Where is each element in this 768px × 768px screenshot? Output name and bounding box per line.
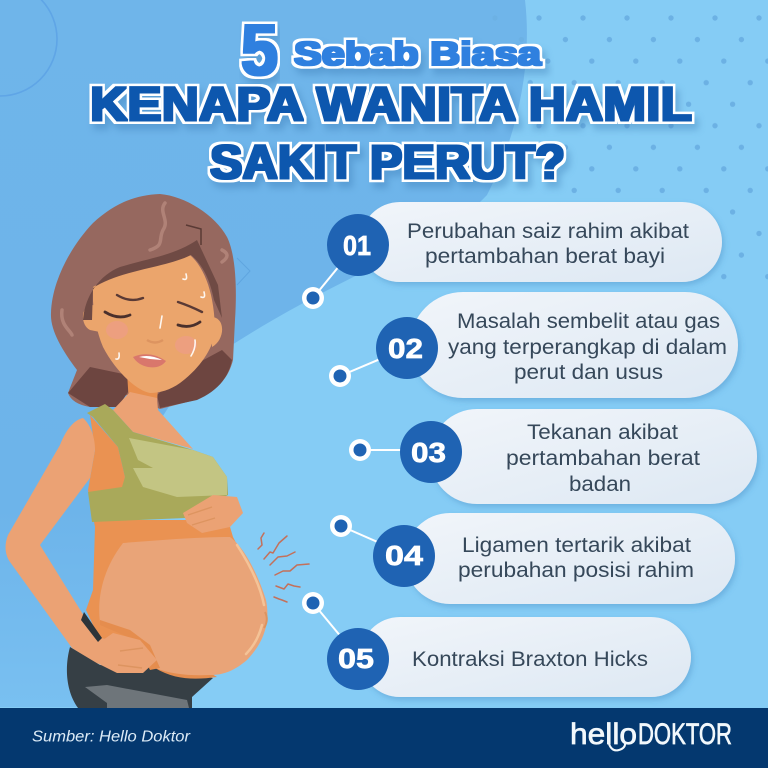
face bbox=[93, 255, 215, 393]
belly highlight bbox=[237, 545, 264, 654]
badge 03: 03 bbox=[411, 437, 446, 468]
hair shadow bbox=[68, 350, 232, 408]
item 05 bbox=[302, 592, 691, 697]
eyes bbox=[105, 312, 200, 326]
dot 02 bbox=[329, 365, 351, 387]
dot 03 bbox=[349, 439, 371, 461]
connector 02 bbox=[340, 357, 385, 376]
waistband bbox=[81, 612, 102, 642]
text 03: Tekanan akibat bbox=[527, 421, 678, 444]
connector 04 bbox=[341, 526, 382, 544]
top bbox=[87, 404, 228, 522]
dot 05 bbox=[302, 592, 324, 614]
pants bbox=[67, 647, 213, 708]
hair highlight bbox=[62, 203, 227, 335]
item 02 bbox=[329, 292, 738, 398]
pill 04 bbox=[405, 513, 735, 604]
logo: helloDOKTOR bbox=[570, 718, 732, 751]
text 02 bbox=[448, 310, 727, 384]
arm bbox=[6, 418, 110, 665]
text 03: badan bbox=[569, 473, 631, 496]
badge 05 bbox=[327, 628, 389, 690]
text 03 bbox=[506, 421, 700, 496]
text 02: Masalah sembelit atau gas bbox=[457, 310, 720, 333]
text 05: Kontraksi Braxton Hicks bbox=[412, 648, 648, 671]
head bbox=[62, 203, 227, 393]
cheeks bbox=[106, 321, 128, 339]
badge 01: 01 bbox=[343, 230, 371, 261]
footer bar bbox=[0, 708, 768, 768]
neck bbox=[127, 372, 172, 410]
fingers bbox=[118, 507, 215, 668]
text 01: pertambahan berat bayi bbox=[425, 245, 665, 268]
logo: helloDOKTOR: DOKTOR bbox=[638, 718, 732, 751]
lower hand shadow bbox=[100, 620, 160, 670]
badge 04: 04 bbox=[385, 540, 424, 571]
pants grey panel bbox=[85, 685, 189, 708]
text 01: Perubahan saiz rahim akibat bbox=[407, 220, 689, 243]
pill 01 bbox=[360, 202, 722, 282]
badge 02 bbox=[376, 317, 438, 379]
text 04: perubahan posisi rahim bbox=[458, 559, 694, 582]
top highlight bbox=[129, 438, 227, 497]
title: Kenapa Wanita Hamil: KENAPA WANITA HAMIL bbox=[90, 78, 692, 132]
chest bbox=[113, 392, 193, 449]
torso bbox=[86, 415, 245, 650]
badge 05: 05 bbox=[338, 643, 374, 674]
title bbox=[90, 11, 692, 190]
logo: helloDOKTOR: hello bbox=[570, 718, 637, 751]
mouth bbox=[133, 354, 166, 367]
list of causes bbox=[302, 202, 757, 697]
back hair bbox=[51, 194, 236, 409]
nose bbox=[147, 340, 163, 342]
sweat drops bbox=[116, 274, 205, 359]
title: Sakit Perut: SAKIT PERUT? bbox=[210, 136, 565, 190]
badge 01 bbox=[327, 214, 389, 276]
pill 03 bbox=[430, 409, 757, 504]
pill 02 bbox=[410, 292, 738, 398]
text 02: perut dan usus bbox=[514, 361, 663, 384]
item 03 bbox=[349, 409, 757, 504]
fringe shadow bbox=[83, 240, 222, 320]
dot 01 bbox=[302, 287, 324, 309]
text 03: pertambahan berat bbox=[506, 447, 700, 470]
item 01 bbox=[302, 202, 722, 309]
connector 01 bbox=[313, 265, 340, 298]
connector 03 bbox=[360, 449, 402, 451]
badge 04 bbox=[373, 525, 435, 587]
text 01 bbox=[407, 220, 689, 268]
connector 05 bbox=[313, 603, 342, 638]
illustration: pregnant woman bbox=[6, 194, 309, 708]
badge 03 bbox=[400, 421, 462, 483]
parting bbox=[186, 225, 201, 245]
title: Sebab Biasa: Sebab Biasa bbox=[294, 35, 542, 72]
text 04: Ligamen tertarik akibat bbox=[462, 534, 691, 557]
belly shadow bbox=[155, 668, 217, 679]
item 04 bbox=[330, 513, 735, 604]
pain marks bbox=[258, 533, 309, 602]
source credit: Sumber: Hello Doktor bbox=[32, 728, 191, 746]
navel bbox=[264, 612, 267, 628]
upper hand bbox=[183, 495, 243, 533]
pill 05 bbox=[360, 617, 691, 697]
text 02: yang terperangkap di dalam bbox=[448, 336, 727, 359]
badge 02: 02 bbox=[388, 333, 423, 364]
title: number 5: 5 bbox=[241, 11, 278, 91]
lower hand bbox=[93, 633, 157, 673]
ears bbox=[83, 305, 222, 347]
belly bbox=[99, 537, 267, 675]
eyebrows bbox=[117, 295, 202, 312]
dot 04 bbox=[330, 515, 352, 537]
text 04 bbox=[458, 534, 694, 582]
